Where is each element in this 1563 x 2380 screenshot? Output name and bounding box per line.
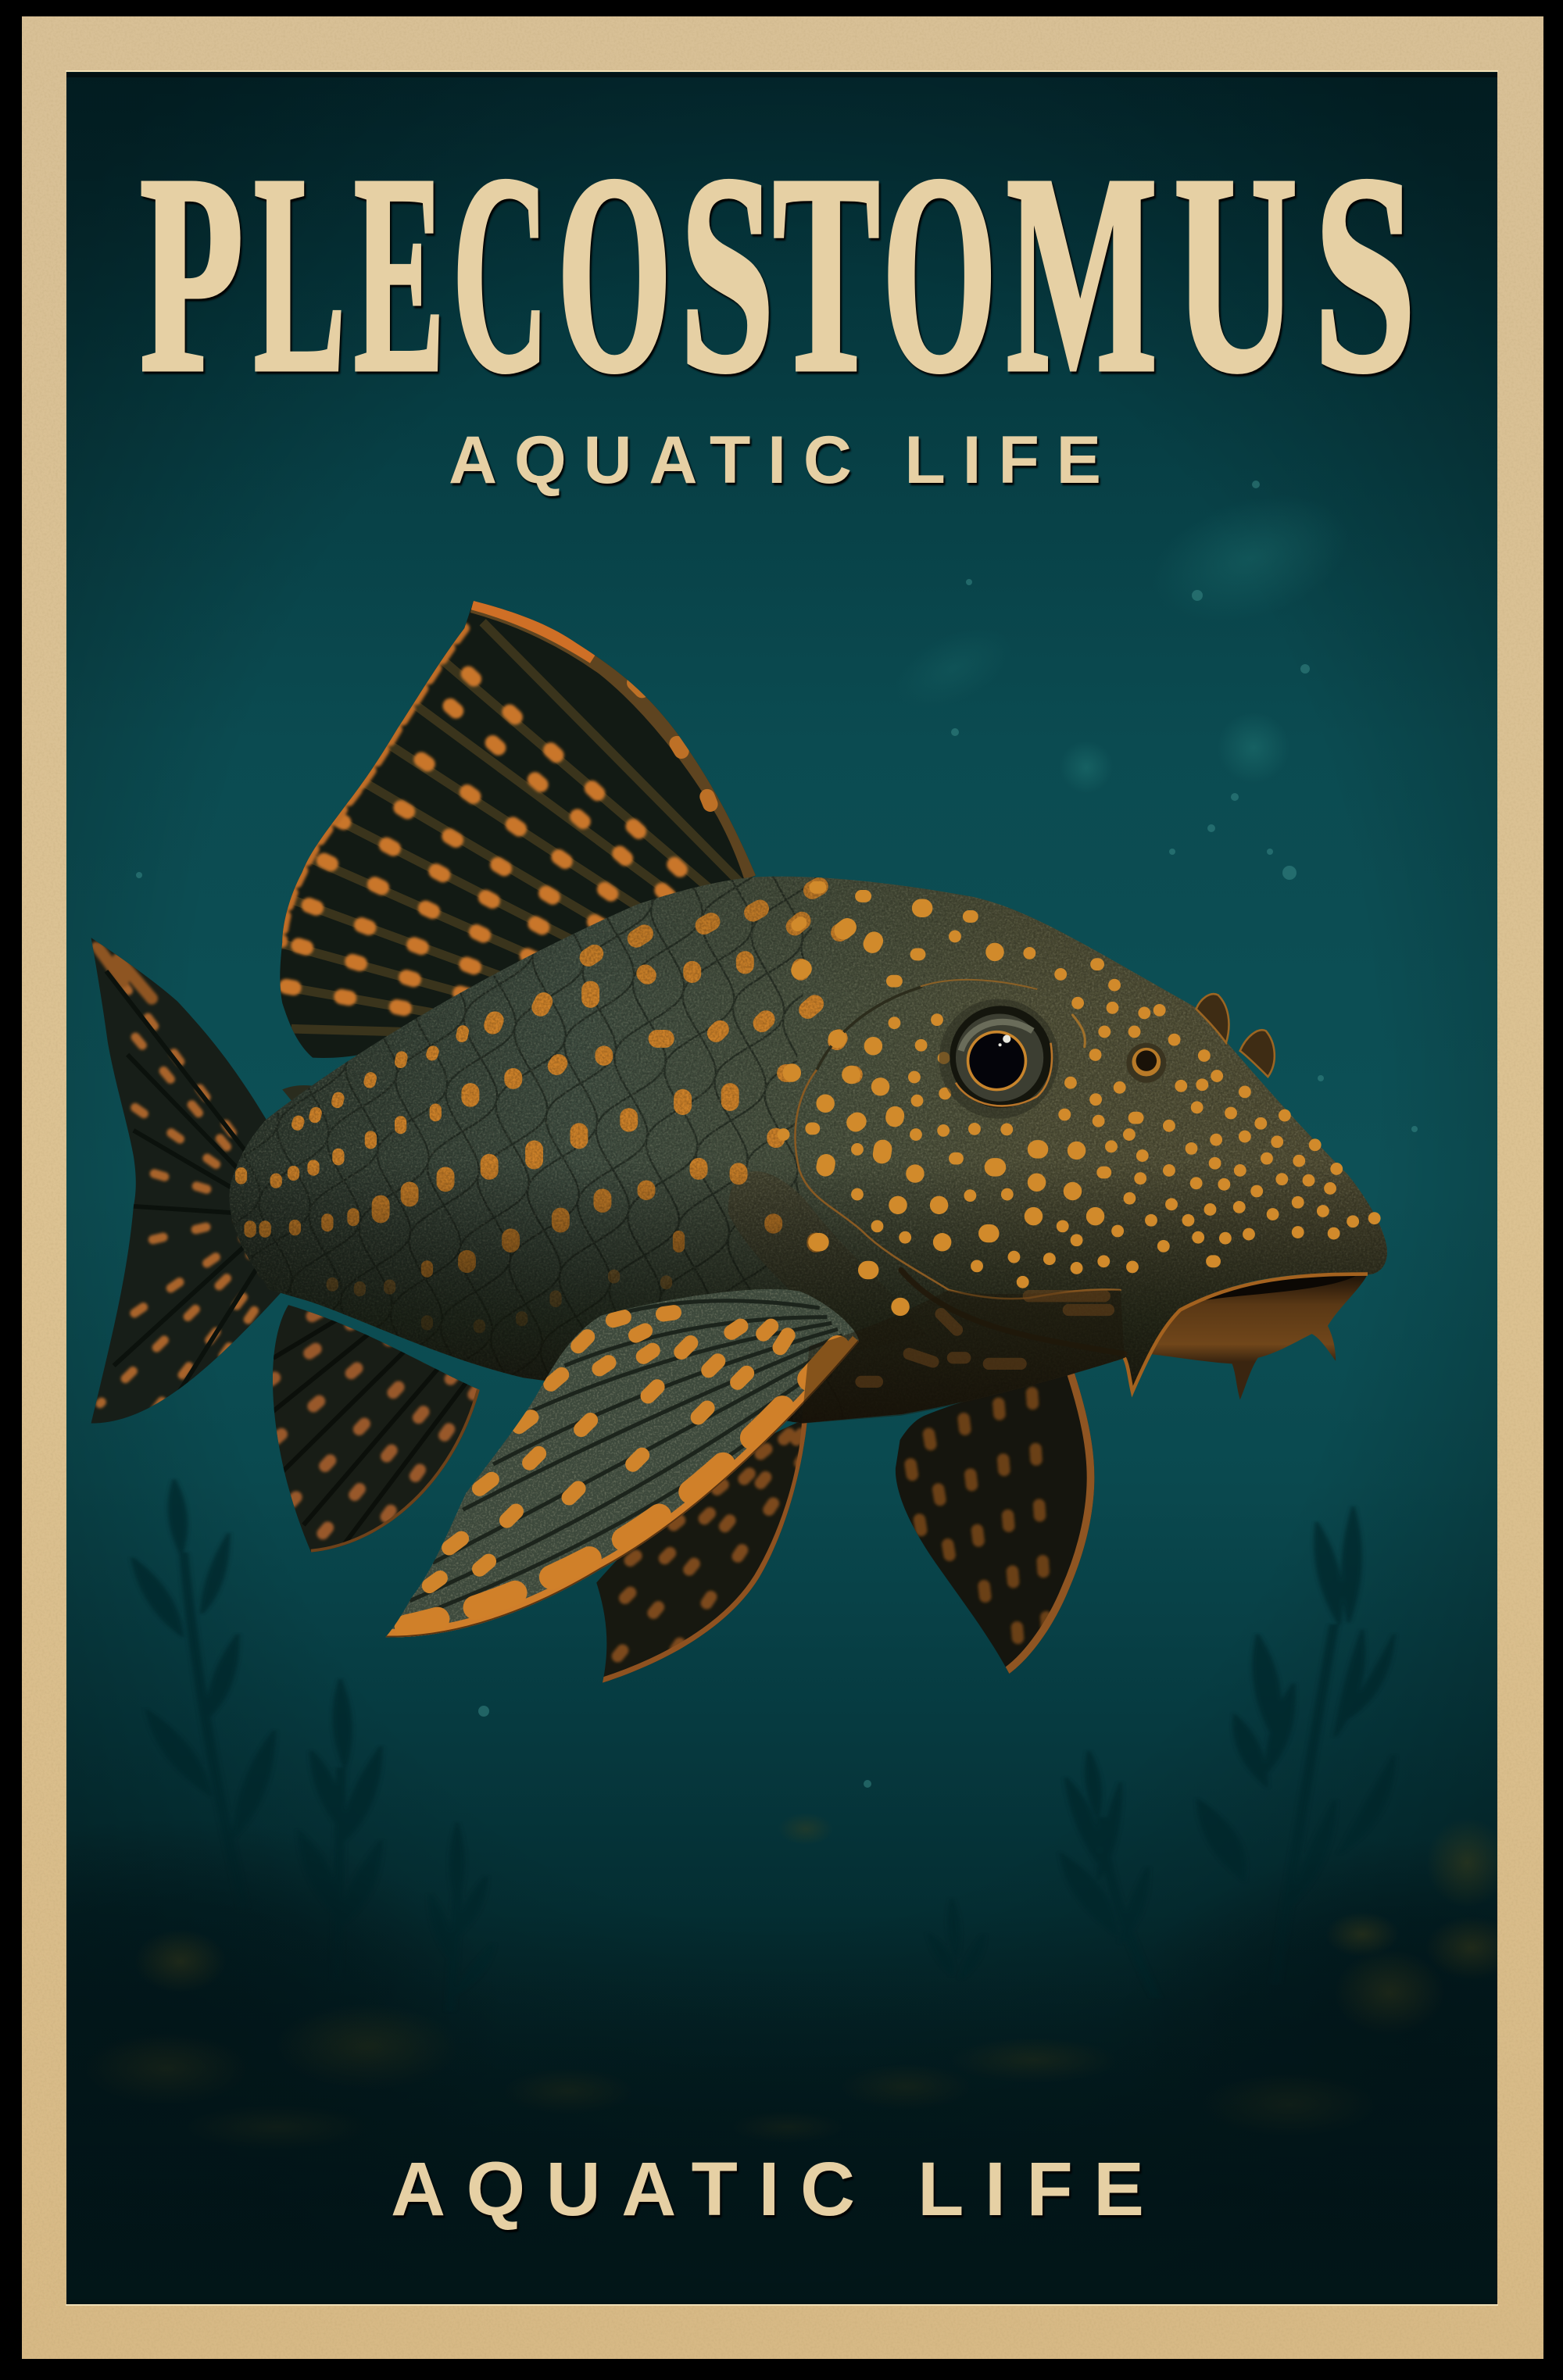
fin: tail xyxy=(91,938,281,1424)
fish head xyxy=(784,888,1375,1424)
title: L xyxy=(254,117,345,431)
fin: dorsal xyxy=(280,601,756,1058)
title: O xyxy=(557,117,671,431)
pectoral orange band xyxy=(385,1342,859,1637)
title: M xyxy=(1007,117,1157,431)
pectoral streaks xyxy=(398,1301,856,1624)
seabed and shadow plants xyxy=(0,1479,1563,2305)
plants right xyxy=(1063,1506,1395,1867)
fin: small rear dorsal xyxy=(282,1085,334,1115)
fin: front ventral xyxy=(888,1366,1100,1685)
fin: rear ventral xyxy=(273,1305,480,1552)
plants left xyxy=(131,1479,462,1858)
fin: large pectoral xyxy=(372,1282,896,1654)
fish illustration xyxy=(76,591,1397,1692)
dorsal orange spots xyxy=(282,628,701,1013)
subtitle: AQUATIC LIFE xyxy=(449,423,1101,498)
body spots xyxy=(241,886,853,1329)
title xyxy=(139,117,1416,431)
pectoral spots xyxy=(430,1313,788,1585)
title: E xyxy=(354,117,445,431)
title: P xyxy=(139,117,243,431)
scale pattern xyxy=(213,850,850,1434)
seabed mud patches xyxy=(84,1813,1518,2150)
title: O xyxy=(882,117,996,431)
tubercles xyxy=(1196,994,1275,1077)
head spots xyxy=(784,888,1375,1306)
eye xyxy=(939,999,1059,1119)
title: C xyxy=(452,117,549,431)
shoulder plate xyxy=(728,1171,926,1350)
jaw blotches xyxy=(861,1296,1108,1381)
seabed shade xyxy=(160,1894,1280,1977)
title: S xyxy=(680,117,774,431)
footer label: AQUATIC LIFE xyxy=(391,2146,1144,2232)
title: T xyxy=(773,117,880,431)
title: U xyxy=(1174,117,1297,431)
fin: rear pectoral under body xyxy=(585,1411,820,1692)
nostril xyxy=(1126,1043,1166,1083)
head plate lines xyxy=(795,980,1125,1354)
underwater haze and bubbles xyxy=(136,471,1418,1788)
fish body xyxy=(213,850,1397,1442)
jaw shadow xyxy=(802,1290,1125,1424)
title: S xyxy=(1314,117,1416,431)
mouth and lips xyxy=(1125,1274,1368,1399)
dorsal ray ridges xyxy=(282,622,744,1032)
